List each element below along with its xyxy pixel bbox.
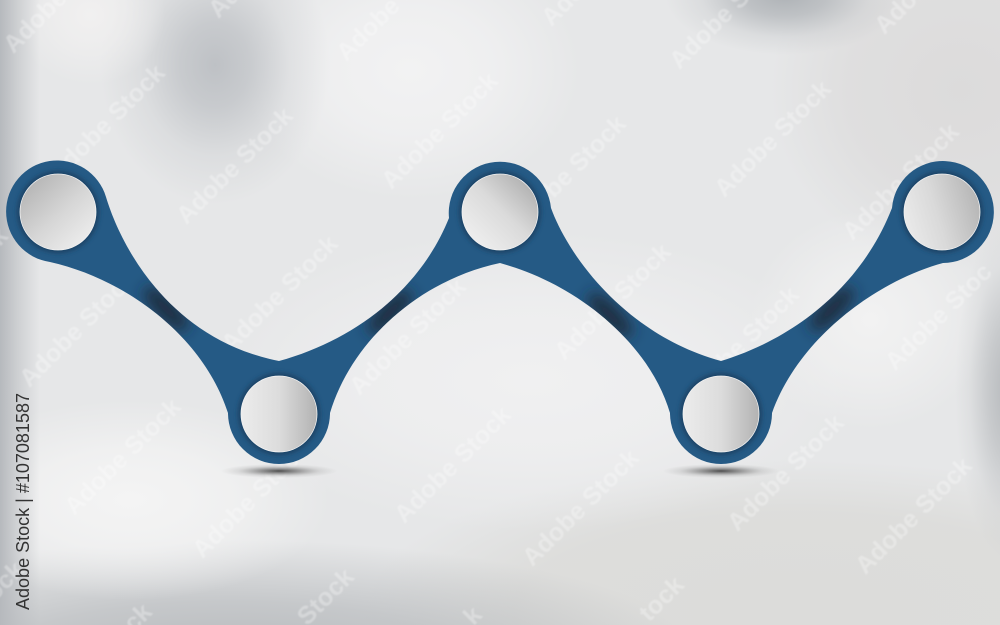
watermark pattern: Adobe Stock: Adobe Stock [504, 110, 632, 238]
watermark pattern: Adobe Stock: Adobe Stock [517, 444, 645, 572]
watermark pattern: Adobe Stock: Adobe Stock [389, 401, 517, 529]
watermark pattern: Adobe Stock: Adobe Stock [344, 273, 472, 401]
watermark pattern: Adobe Stock: Adobe Stock [216, 230, 344, 358]
watermark pattern: Adobe Stock: Adobe Stock [709, 75, 837, 203]
node 2: circle [241, 376, 317, 452]
node 3: circle [462, 174, 538, 250]
watermark pattern: Adobe Stock: Adobe Stock [850, 452, 978, 580]
node 5: circle [904, 174, 980, 250]
watermark pattern: Adobe Stock: Adobe Stock [171, 102, 299, 230]
watermark pattern: Adobe Stock: Adobe Stock [549, 238, 677, 366]
watermark pattern: Adobe Stock: Adobe Stock [59, 393, 187, 521]
node 4: circle [683, 376, 759, 452]
ground shadow: fourth node [663, 464, 779, 478]
watermark pattern: Adobe Stock: Adobe Stock [677, 281, 805, 409]
node 1: circle [20, 174, 96, 250]
watermark pattern: Adobe Stock: Adobe Stock [14, 265, 142, 393]
watermark pattern: Adobe Stock: Adobe Stock [837, 118, 965, 246]
watermark pattern: Adobe Stock: Adobe Stock [43, 59, 171, 187]
vertical credit text: Adobe Stock | #107081587 [13, 393, 33, 610]
ground shadow: second node [221, 464, 337, 478]
watermark pattern: Adobe Stock: Adobe Stock [376, 67, 504, 195]
watermark pattern: Adobe Stock: Adobe Stock [187, 436, 315, 564]
wave ribbon: blue connector [6, 160, 994, 464]
watermark pattern: Adobe Stock: Adobe Stock [722, 409, 850, 537]
watermark pattern: Adobe Stock: Adobe Stoc [880, 258, 998, 376]
